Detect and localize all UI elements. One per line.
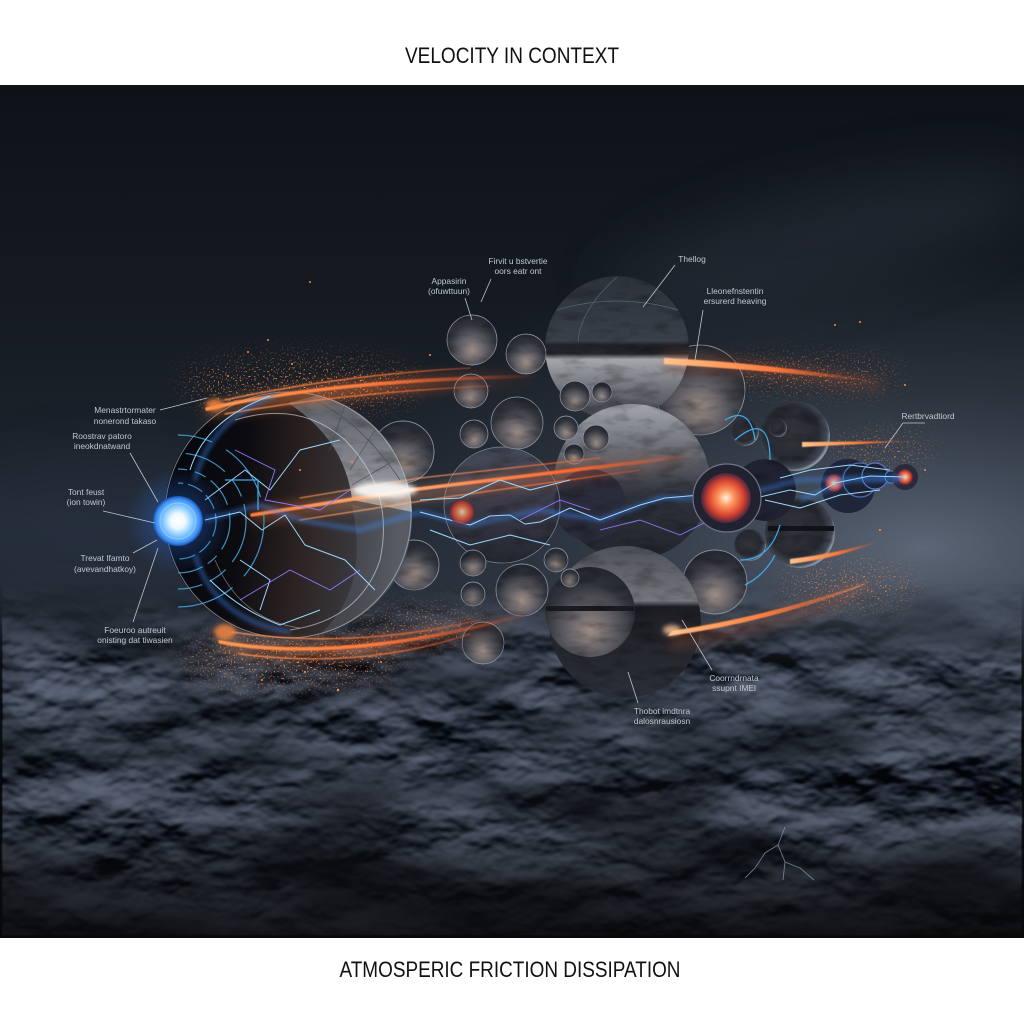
label: far right: Rertbrvadtiord bbox=[901, 411, 955, 421]
label: dome: Thellog bbox=[678, 254, 706, 264]
label: left upper: Menastrtormater bbox=[94, 405, 156, 415]
label: top sphere bbox=[428, 276, 472, 320]
label: front: Tont feust bbox=[68, 487, 105, 497]
label: bottom centre bbox=[628, 672, 691, 726]
streak filaments bbox=[207, 368, 690, 659]
label: thrust: (avevandhatkoy) bbox=[74, 564, 136, 574]
label: left upper bbox=[94, 398, 207, 426]
large left sphere bbox=[164, 391, 412, 639]
label: top arrow: Firvit u bstvertie bbox=[488, 256, 548, 266]
label: far right bbox=[885, 411, 955, 448]
label: dome bbox=[643, 254, 706, 307]
spark field bbox=[162, 336, 950, 708]
label: upper right: ersurerd heaving bbox=[704, 296, 767, 306]
label: top sphere: (ofuwttuun) bbox=[428, 286, 470, 296]
panel seams on central spheres bbox=[444, 277, 678, 563]
rear sphere cluster bbox=[372, 345, 835, 614]
label: lower right: ssupnt IMEl bbox=[712, 683, 756, 693]
small chrome spheres bbox=[447, 315, 612, 664]
label: top arrow: oors eatr ont bbox=[494, 266, 542, 276]
label: booster: Roostrav patoro bbox=[72, 431, 132, 441]
title: VELOCITY IN CONTEXT bbox=[405, 43, 619, 68]
label: front bbox=[67, 487, 155, 523]
distant lightning bbox=[745, 827, 814, 880]
label: booster: ineokdnatwand bbox=[74, 441, 131, 451]
label: lower left bbox=[97, 548, 173, 645]
label: upper right bbox=[695, 286, 767, 360]
label: lower left: Foeuroo autreuit bbox=[104, 625, 166, 635]
label: upper right: Lleonefnstentin bbox=[707, 286, 764, 296]
caption: ATMOSPERIC FRICTION DISSIPATION bbox=[340, 957, 680, 982]
orange reactor core bbox=[449, 464, 761, 532]
blue electric arcs bbox=[92, 395, 905, 632]
label: lower right: Coorrndrnata bbox=[709, 673, 759, 683]
tail chain of spheres bbox=[821, 459, 918, 513]
label: booster bbox=[72, 431, 158, 502]
blue plasma core bbox=[126, 469, 230, 573]
label: top arrow bbox=[481, 256, 548, 302]
label: bottom centre: Thobot imdtnra bbox=[634, 706, 691, 716]
orange friction streaks bbox=[205, 356, 920, 659]
circuit rings around core bbox=[178, 434, 265, 608]
label: thrust: Trevat Ifamto bbox=[80, 553, 130, 563]
arc glow bbox=[195, 395, 905, 632]
label: bottom centre: dalosnrausiosn bbox=[634, 716, 691, 726]
cloud layer bbox=[0, 580, 1024, 938]
label: top sphere: Appasirin bbox=[432, 276, 467, 286]
label: lower right bbox=[682, 620, 759, 693]
streak glow bbox=[205, 356, 880, 657]
label: thrust bbox=[74, 540, 157, 574]
large central spheres bbox=[444, 276, 710, 698]
label: lower left: onisting dat tiwasien bbox=[97, 635, 173, 645]
label: left upper: nonerond takaso bbox=[94, 416, 157, 426]
loose sparks bbox=[227, 281, 926, 691]
hot white streak core bbox=[353, 482, 417, 498]
label: front: (ion towin) bbox=[67, 497, 106, 507]
